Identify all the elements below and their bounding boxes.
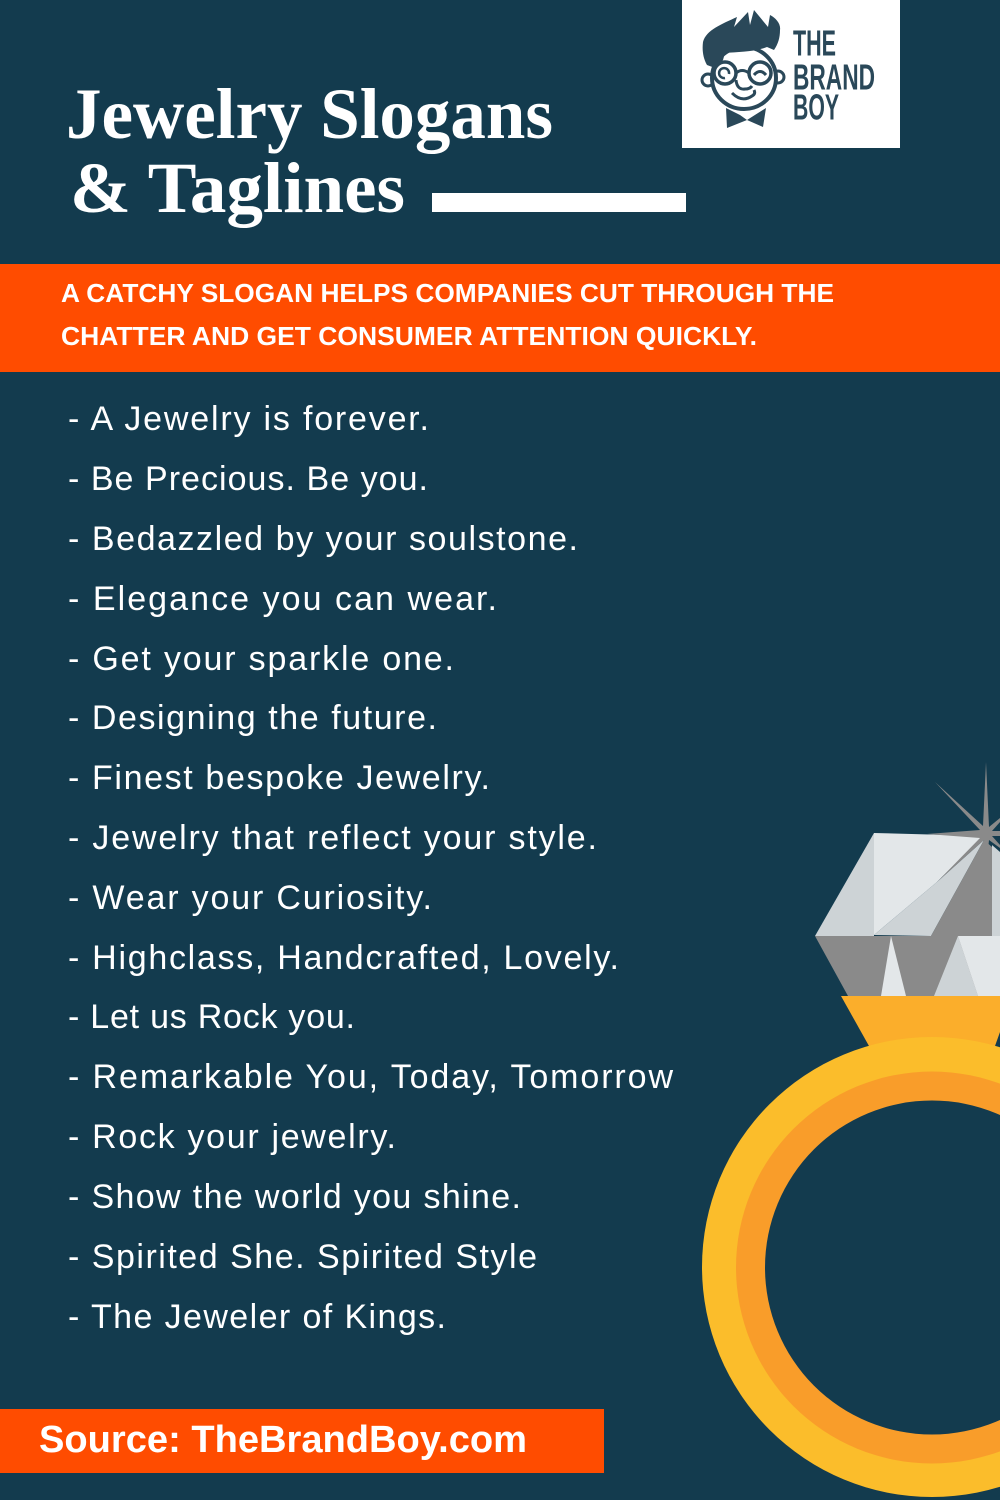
slogan list: - Elegance you can wear. (68, 580, 497, 618)
logo wordmark: THE (793, 22, 836, 64)
slogan list: - Jewelry that reflect your style. (68, 819, 597, 857)
slogan list: - The Jeweler of Kings. (68, 1298, 446, 1336)
slogan list (68, 400, 673, 1336)
icon: boy face (702, 10, 784, 128)
slogan list: - A Jewelry is forever. (68, 400, 429, 438)
banner: intro statement: CHATTER AND GET CONSUMER ATTENTION QUICKLY. (61, 321, 757, 351)
title: Jewelry Slogans (66, 74, 553, 154)
banner: intro statement: A CATCHY SLOGAN HELPS COMPANIES CUT THROUGH THE (61, 278, 834, 308)
slogan list: - Finest bespoke Jewelry. (68, 759, 490, 797)
title: & Taglines (70, 148, 405, 228)
slogan list: - Wear your Curiosity. (68, 879, 432, 917)
logo wordmark: BOY (793, 86, 839, 128)
slogan list: - Bedazzled by your soulstone. (68, 520, 578, 558)
source bar: Source: TheBrandBoy.com (39, 1419, 527, 1461)
icon: diamond ring (702, 762, 1000, 1497)
slogan list: - Let us Rock you. (68, 998, 355, 1036)
slogan list: - Get your sparkle one. (68, 640, 454, 678)
ring band (702, 1037, 1000, 1497)
slogan list: - Be Precious. Be you. (68, 460, 428, 498)
source bar (0, 1409, 604, 1473)
ring setting (841, 996, 1000, 1046)
slogan list: - Designing the future. (68, 699, 437, 737)
slogan list: - Remarkable You, Today, Tomorrow (68, 1058, 673, 1096)
banner: intro statement (0, 264, 1000, 372)
logo: The Brand Boy (682, 0, 900, 148)
title (66, 74, 553, 228)
logo wordmark: BRAND (793, 56, 875, 98)
slogan list: - Rock your jewelry. (68, 1118, 396, 1156)
diamond (815, 833, 1000, 996)
slogan list: - Spirited She. Spirited Style (68, 1238, 537, 1276)
sparkle (927, 762, 1000, 882)
slogan list: - Highclass, Handcrafted, Lovely. (68, 939, 619, 977)
logo wordmark (793, 22, 875, 128)
slogan list: - Show the world you shine. (68, 1178, 521, 1216)
title underline bar (432, 193, 686, 212)
